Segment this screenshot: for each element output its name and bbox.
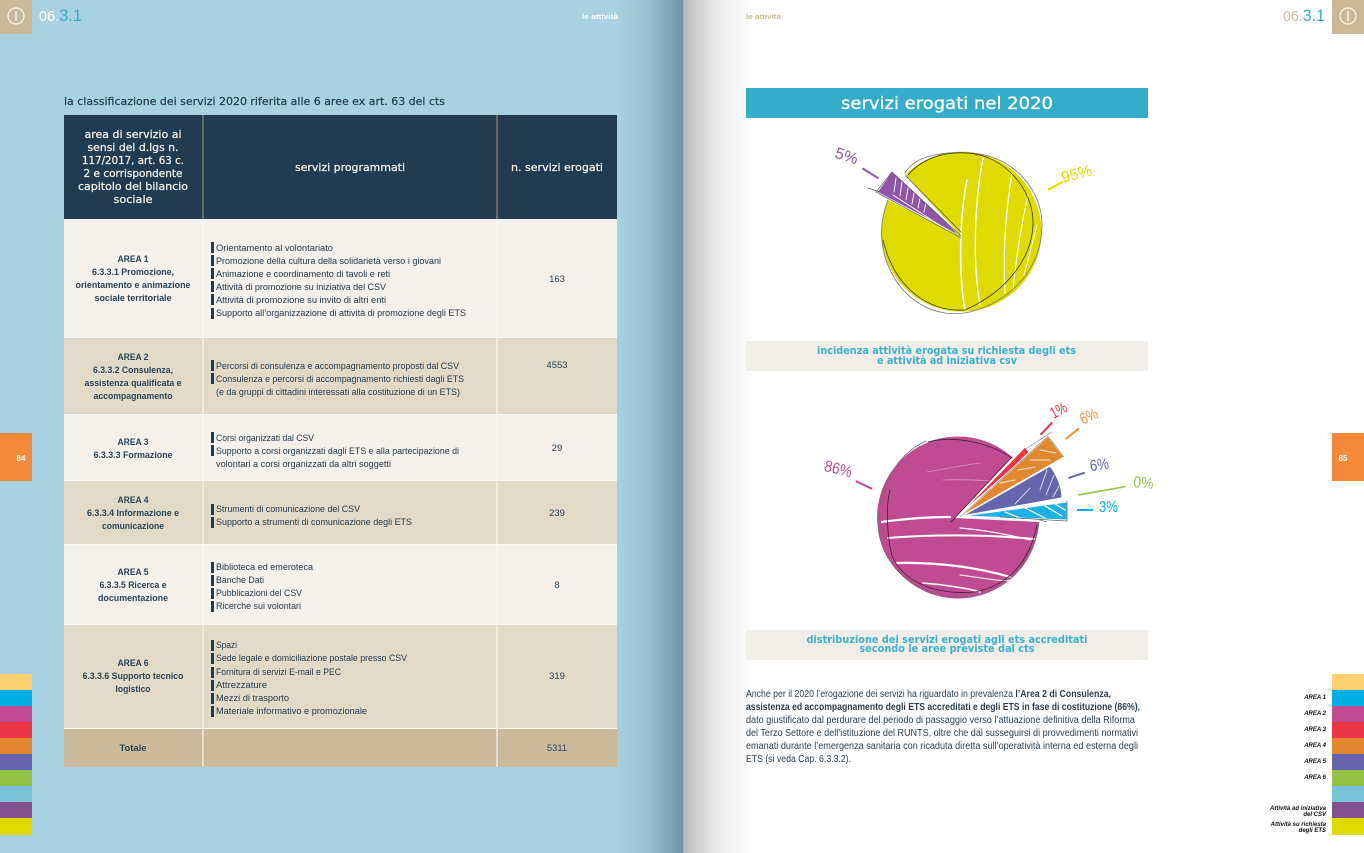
label: 95%: 95%: [1060, 162, 1094, 187]
right page running title: le attività: [746, 14, 781, 21]
slice: 5% CSV initiative: [878, 172, 961, 236]
table header row: sensi del d.lgs n.: [88, 142, 178, 154]
commentary paragraph: del Terzo Settore e dell’istituzione del RUNTS, oltre che dal susseguirsi di provvedimenti normativi: [746, 728, 1138, 739]
commentary paragraph: dato giustificato dal perdurare del periodo di passaggio verso l’attuazione definitiva della Riforma: [746, 715, 1136, 726]
left colour sidebar: [0, 674, 32, 835]
row: area 2: (e da gruppi di cittadini interessati alla costituzione di un ETS): [216, 387, 460, 398]
row: area 6: [64, 624, 617, 728]
row: area 5: AREA 5: [118, 566, 148, 577]
row: area 1: orientamento e animazione: [76, 279, 190, 290]
right colour legend: del CSV: [1303, 812, 1327, 818]
commentary paragraph: Anche per il 2020 l’erogazione dei servizi ha riguardato in prevalenza l’Area 2 di Consulenza,: [746, 689, 1111, 700]
left page running title: le attività: [582, 14, 618, 21]
row: area 4: comunicazione: [102, 520, 164, 531]
caption: second chart: secondo le aree previste dal cts: [860, 643, 1034, 655]
row: area 6: Mezzi di trasporto: [216, 693, 289, 704]
row: area 1: [64, 219, 617, 337]
right page number tab: [1332, 433, 1364, 481]
commentary paragraph: ETS (si veda Cap. 6.3.3.2).: [746, 754, 851, 765]
row: area 1: AREA 1: [118, 253, 148, 264]
row: area 3: volontari a corsi organizzati da altri soggetti: [216, 459, 391, 470]
slice: 95% requests: [881, 152, 1041, 312]
left page number tab: 84: [17, 454, 26, 463]
row: area 5: Banche Dati: [216, 575, 264, 586]
page heading bar: [746, 88, 1148, 118]
slice: 1% area 3: [958, 447, 1029, 516]
row: area 3: Supporto a corsi organizzati dagli ETS e alla partecipazione di: [216, 446, 459, 457]
row: area 6: Materiale informativo e promozionale: [216, 706, 367, 717]
row: area 6: AREA 6: [118, 657, 148, 668]
caption: second chart: distribuzione dei servizi erogati agli ets accreditati: [806, 634, 1088, 646]
row: area 6: Sede legale e domiciliazione postale presso CSV: [216, 653, 408, 664]
table header row: n. servizi erogati: [511, 162, 603, 174]
row: area 4: 6.3.3.4 Informazione e: [87, 507, 179, 518]
table title: la classificazione dei servizi 2020 riferita alle 6 aree ex art. 63 del cts: [64, 95, 445, 108]
row: area 2: Percorsi di consulenza e accompagnamento proposti dal CSV: [216, 361, 460, 372]
row: area 3: 6.3.3.3 Formazione: [94, 449, 172, 460]
row: area 1: Orientamento al volontariato: [216, 243, 333, 254]
row: area 5: 6.3.3.5 Ricerca e: [100, 579, 166, 590]
left page section number: 06.3.1: [39, 6, 82, 25]
table header row: 2 e corrispondente: [84, 168, 182, 180]
row: area 6: logistico: [116, 683, 151, 694]
row: area 3: 29: [552, 443, 562, 454]
label: 86%: 86%: [822, 458, 854, 481]
slice: 3% area 1: [963, 502, 1067, 520]
row: area 4: [64, 480, 617, 544]
table header row: 117/2017, art. 63 c.: [82, 155, 184, 167]
label: 6% indigo: 6%: [1089, 456, 1110, 475]
left page header tab: [0, 0, 32, 34]
table header row: servizi programmati: [295, 162, 405, 174]
row: area 6: Fornitura di servizi E-mail e PEC: [216, 667, 341, 678]
caption: second chart: [746, 630, 1148, 660]
row: area 3: Corsi organizzati dal CSV: [216, 433, 315, 444]
right colour legend: AREA 4: [1303, 743, 1327, 749]
caption: first chart: incidenza attività erogata su richiesta degli ets: [817, 345, 1076, 357]
right colour legend: AREA 5: [1303, 759, 1327, 765]
label: 86%: [822, 458, 873, 490]
row: area 1: 6.3.3.1 Promozione,: [92, 266, 174, 277]
right page section number: 06.3.1: [1283, 6, 1325, 25]
row: area 6: 6.3.3.6 Supporto tecnico: [82, 670, 184, 681]
row: total: 5311: [547, 742, 567, 753]
label: 6% indigo: [1068, 456, 1110, 479]
row: area 2: 6.3.3.2 Consulenza,: [93, 364, 173, 375]
pie chart: distribution by area: [822, 400, 1154, 598]
row: area 2: assistenza qualificata e: [84, 377, 182, 388]
row: area 2: accompagnamento: [94, 390, 173, 401]
row: area 5: documentazione: [98, 592, 168, 603]
label: 6% orange: 6%: [1077, 405, 1101, 428]
label: 95%: [1047, 162, 1094, 191]
services table: [64, 115, 617, 767]
label: 0%: 0%: [1133, 474, 1154, 493]
commentary paragraph: emanati durante l’emergenza sanitaria con ricaduta diretta sull’operatività interna ed esterna degli: [746, 741, 1138, 752]
row: area 5: Pubblicazioni del CSV: [216, 588, 303, 599]
right colour legend: Attività su richiesta: [1270, 822, 1327, 828]
table header row: [64, 115, 617, 219]
row: area 2: 4553: [546, 360, 568, 371]
row: area 4: Supporto a strumenti di comunicazione degli ETS: [216, 517, 412, 528]
row: area 1: 163: [549, 274, 565, 285]
row: area 5: Biblioteca ed emeroteca: [216, 562, 314, 573]
row: area 6: Spazi: [216, 640, 237, 651]
table header row: capitolo del bilancio: [78, 181, 188, 193]
row: area 6: Attrezzature: [216, 680, 267, 691]
row: total: [64, 728, 617, 767]
slice: 6% area 5: [962, 466, 1062, 516]
label: 3%: 3%: [1099, 499, 1118, 516]
row: area 1: Attività di promozione su invito di altri enti: [216, 295, 386, 306]
label: 6% orange: [1065, 405, 1101, 440]
table header row: sociale: [114, 194, 152, 206]
left page number tab: [0, 433, 32, 481]
row: area 1: Attività di promozione su iniziativa del CSV: [216, 282, 387, 293]
row: area 1: Animazione e coordinamento di tavoli e reti: [216, 269, 390, 280]
row: area 5: Ricerche sui volontari: [216, 601, 301, 612]
row: area 5: [64, 544, 617, 624]
row: area 4: Strumenti di comunicazione del CSV: [216, 504, 361, 515]
label: 5%: [833, 145, 879, 179]
right colour legend: AREA 2: [1303, 711, 1327, 717]
right colour legend: [1269, 674, 1364, 835]
row: area 4: 239: [549, 508, 565, 519]
slice: 86% area 2: [877, 436, 1039, 598]
right colour legend: AREA 6: [1303, 775, 1327, 781]
right colour legend: degli ETS: [1299, 828, 1326, 834]
right page header tab: [1332, 0, 1364, 34]
pie chart: requested vs CSV initiative: [833, 145, 1094, 314]
label: 0%: [1078, 474, 1154, 496]
table header row: area di servizio ai: [84, 129, 182, 141]
page heading bar: servizi erogati nel 2020: [841, 94, 1053, 114]
label: 1%: 1%: [1047, 400, 1070, 423]
row: area 6: 319: [549, 671, 565, 682]
row: area 5: 8: [554, 580, 560, 591]
row: area 2: Consulenza e percorsi di accompagnamento richiesti dagli ETS: [216, 374, 464, 385]
caption: first chart: [746, 341, 1148, 371]
right page number tab: 85: [1339, 454, 1348, 463]
row: area 4: AREA 4: [118, 494, 149, 505]
row: area 2: [64, 337, 617, 414]
row: area 1: Promozione della cultura della solidarietà verso i giovani: [216, 256, 441, 267]
right colour legend: Attività ad iniziativa: [1269, 806, 1327, 812]
row: total: Totale: [120, 742, 146, 753]
label: 3%: [1077, 499, 1118, 516]
row: area 1: sociale territoriale: [94, 292, 172, 303]
caption: first chart: e attività ad iniziativa csv: [877, 355, 1017, 367]
row: area 3: [64, 414, 617, 480]
right colour legend: AREA 1: [1303, 695, 1327, 701]
commentary paragraph: [746, 689, 1140, 765]
slice: 6% area 4: [960, 436, 1064, 517]
commentary paragraph: assistenza ed accompagnamento degli ETS accreditati e degli ETS in fase di costituzione (86%),: [746, 702, 1140, 713]
right colour legend: AREA 3: [1303, 727, 1327, 733]
row: area 3: AREA 3: [118, 436, 148, 447]
label: 5%: 5%: [833, 145, 860, 168]
row: area 2: AREA 2: [118, 351, 148, 362]
label: 1%: [1040, 400, 1070, 436]
row: area 1: Supporto all’organizzazione di attività di promozione degli ETS: [216, 308, 466, 319]
